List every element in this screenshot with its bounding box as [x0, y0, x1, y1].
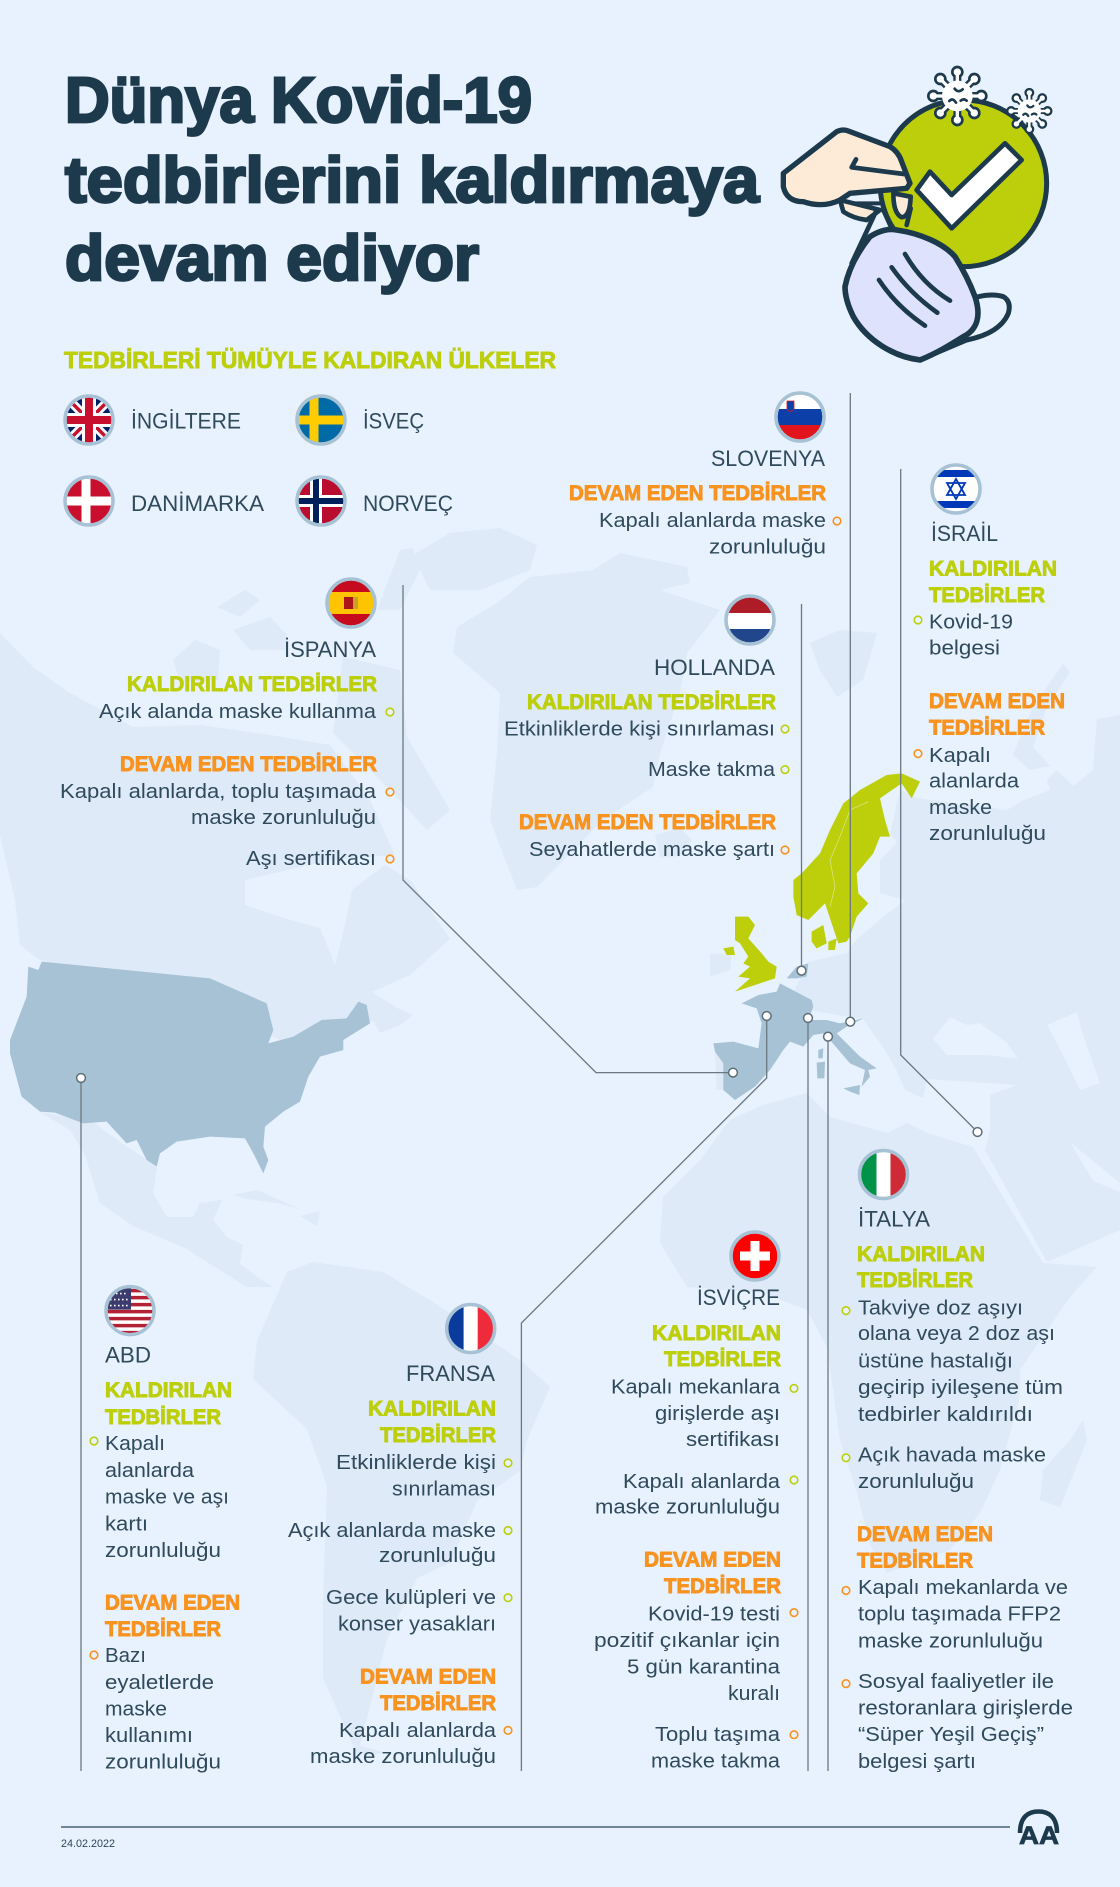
title: tedbirlerini kaldırmaya: [65, 144, 759, 216]
heading: countries that lifted all measures: TEDBİRLERİ TÜMÜYLE KALDIRAN ÜLKELER: [64, 347, 556, 373]
panel: Italy: zorunluluğu: [858, 1470, 974, 1493]
panel: Spain: DEVAM EDEN TEDBİRLER: [120, 752, 377, 776]
panel: Switzerland: maske zorunluluğu: [595, 1496, 780, 1518]
panel: Israel: alanlarda: [929, 770, 1020, 793]
panel: Netherlands: KALDIRILAN TEDBİRLER: [527, 690, 776, 714]
panel: Israel: TEDBİRLER: [929, 716, 1045, 740]
icon: flag of France: [446, 1304, 496, 1354]
panel: USA: kartı: [105, 1512, 148, 1536]
panel: Switzerland: Toplu taşıma: [655, 1723, 781, 1746]
panel: USA: zorunluluğu: [105, 1539, 221, 1562]
illustration: hand removing mask with check mark: [783, 67, 1051, 360]
panel: Israel: İSRAİL: [931, 521, 998, 546]
highlighted United States: [10, 962, 370, 1173]
panel: USA: maske: [105, 1698, 167, 1720]
flag and label: United Kingdom: [64, 395, 241, 445]
panel: Netherlands: Seyahatlerde maske şartı: [529, 838, 775, 861]
panel: Spain: Aşı sertifikası: [246, 847, 376, 870]
panel: Switzerland: sertifikası: [686, 1428, 780, 1451]
panel: Italy: Açık havada maske: [858, 1444, 1046, 1467]
panel: Slovenia: SLOVENYA: [711, 446, 825, 471]
panel: France: TEDBİRLER: [380, 1691, 496, 1715]
icon: flag of Slovenia: [775, 392, 825, 442]
panel: Slovenia: [569, 392, 841, 558]
panel: France: DEVAM EDEN: [360, 1665, 496, 1689]
panel: Spain: Kapalı alanlarda, toplu taşımada: [60, 780, 377, 803]
icon: Anadolu Agency logo: AA: [1019, 1822, 1059, 1850]
panel: Switzerland: girişlerde aşı: [655, 1402, 780, 1425]
panel: France: Kapalı alanlarda: [339, 1719, 497, 1742]
panel: USA: Bazı: [105, 1644, 146, 1667]
panel: Switzerland: kuralı: [728, 1682, 780, 1705]
panel: Switzerland: DEVAM EDEN: [644, 1548, 781, 1572]
panel: Spain: Açık alanda maske kullanma: [99, 700, 377, 723]
icon: small virus: [1007, 89, 1051, 133]
panel: Spain: maske zorunluluğu: [191, 806, 376, 829]
icon: flag of Israel: [931, 464, 981, 514]
panel: France: sınırlaması: [392, 1478, 496, 1501]
panel: Italy: TEDBİRLER: [857, 1548, 973, 1572]
panel: Italy: [842, 1150, 1073, 1773]
panel: Netherlands: [504, 595, 789, 861]
panel: France: Etkinliklerde kişi: [336, 1451, 496, 1474]
panel: USA: maske ve aşı: [105, 1486, 229, 1509]
panel: Slovenia: Kapalı alanlarda maske: [599, 509, 826, 532]
panel: Italy: üstüne hastalığı: [858, 1350, 1013, 1373]
flag and label: Norway: [296, 476, 453, 526]
panel: USA: TEDBİRLER: [105, 1617, 221, 1641]
panel: Israel: maske: [929, 796, 992, 819]
panel: Italy: restoranlara girişlerde: [858, 1697, 1073, 1720]
panel: Slovenia: DEVAM EDEN TEDBİRLER: [569, 481, 826, 505]
panel: USA: alanlarda: [105, 1459, 195, 1482]
flag and label: Sweden: [296, 395, 424, 445]
panel: USA: [90, 1286, 240, 1774]
panel: Switzerland: TEDBİRLER: [664, 1574, 781, 1598]
panel: Italy: TEDBİRLER: [857, 1268, 973, 1292]
panel: USA: zorunluluğu: [105, 1751, 221, 1774]
panel: USA: TEDBİRLER: [105, 1405, 221, 1429]
panel: Switzerland: maske takma: [651, 1749, 781, 1772]
flag and label: Norway: NORVEÇ: [363, 491, 453, 516]
panel: USA: eyaletlerde: [105, 1671, 214, 1694]
panel: France: Açık alanlarda maske: [288, 1519, 496, 1542]
panel: Israel: Kapalı: [929, 744, 991, 767]
panel: Italy: İTALYA: [858, 1206, 930, 1231]
highlighted Europe countries: [710, 773, 920, 1100]
panel: Switzerland: 5 gün karantina: [627, 1655, 781, 1678]
panel: France: KALDIRILAN: [368, 1397, 496, 1421]
icon: flag of Italy: [858, 1150, 908, 1200]
panel: Italy: “Süper Yeşil Geçiş”: [858, 1723, 1044, 1746]
flag and label: Denmark: DANİMARKA: [131, 491, 264, 516]
connector lines and map markers: [77, 393, 982, 1771]
panel: Spain: KALDIRILAN TEDBİRLER: [127, 672, 377, 696]
title: [65, 64, 759, 294]
panel: USA: Kapalı: [105, 1432, 165, 1455]
panel: Netherlands: HOLLANDA: [654, 655, 775, 680]
world map background: [0, 528, 1120, 1754]
panel: Israel: KALDIRILAN: [929, 557, 1057, 581]
panel: Italy: Sosyal faaliyetler ile: [858, 1670, 1054, 1693]
flag and label: United Kingdom: İNGİLTERE: [131, 408, 241, 434]
panel: France: TEDBİRLER: [380, 1423, 496, 1447]
icon: face mask: [845, 208, 1009, 360]
panel: Israel: DEVAM EDEN: [929, 689, 1065, 713]
panel: Israel: belgesi: [929, 637, 1000, 660]
icon: flag of Switzerland: [730, 1231, 780, 1281]
panel: Netherlands: DEVAM EDEN TEDBİRLER: [519, 810, 776, 834]
panel: Italy: belgesi şartı: [858, 1750, 976, 1773]
panel: France: Gece kulüpleri ve: [326, 1586, 496, 1609]
panel: Spain: İSPANYA: [284, 637, 376, 662]
icon: flag of Spain: [326, 578, 376, 628]
panel: Israel: zorunluluğu: [929, 822, 1046, 845]
panel: Italy: tedbirler kaldırıldı: [858, 1403, 1033, 1426]
panel: countries that lifted all measures: [64, 395, 453, 526]
panel: Italy: Kapalı mekanlarda ve: [858, 1576, 1068, 1599]
panel: Switzerland: İSVİÇRE: [697, 1285, 780, 1310]
panel: France: maske zorunluluğu: [310, 1745, 496, 1768]
panel: USA: KALDIRILAN: [105, 1378, 232, 1402]
panel: Switzerland: TEDBİRLER: [664, 1347, 781, 1371]
icon: Anadolu Agency logo: [1019, 1812, 1059, 1850]
panel: Italy: KALDIRILAN: [857, 1242, 985, 1266]
panel: Switzerland: KALDIRILAN: [652, 1321, 781, 1345]
panel: Israel: Kovid-19: [929, 611, 1013, 634]
panel: Israel: [914, 464, 1065, 845]
panel: Italy: Takviye doz aşıyı: [858, 1296, 1023, 1319]
title: devam ediyor: [65, 222, 479, 294]
icon: flag of the USA: [105, 1286, 155, 1336]
panel: Italy: maske zorunluluğu: [858, 1630, 1043, 1652]
panel: France: [288, 1304, 512, 1768]
panel: France: zorunluluğu: [379, 1544, 496, 1567]
icon: flag of the Netherlands: [725, 595, 775, 645]
icon: hand: [783, 130, 911, 220]
icon: green check circle: [880, 100, 1047, 267]
panel: Switzerland: Kapalı alanlarda: [623, 1470, 781, 1493]
footer: [61, 1812, 1059, 1850]
panel: Netherlands: Maske takma: [648, 758, 776, 781]
icon: large virus: [928, 67, 986, 125]
panel: Spain: [60, 578, 394, 870]
title: Dünya Kovid-19: [65, 64, 532, 136]
panel: Switzerland: Kovid-19 testi: [648, 1603, 780, 1626]
panel: Switzerland: [594, 1231, 798, 1772]
panel: Netherlands: Etkinliklerde kişi sınırlaması: [504, 718, 775, 740]
panel: USA: ABD: [105, 1342, 151, 1368]
panel: Italy: toplu taşımada FFP2: [858, 1603, 1061, 1626]
flag and label: Sweden: İSVEÇ: [363, 408, 424, 434]
flag and label: Denmark: [64, 476, 264, 526]
panel: USA: kullanımı: [105, 1724, 193, 1747]
panel: Italy: geçirip iyileşene tüm: [858, 1376, 1063, 1399]
panel: Switzerland: Kapalı mekanlara: [611, 1376, 781, 1398]
panel: USA: DEVAM EDEN: [105, 1591, 240, 1615]
panel: Slovenia: zorunluluğu: [709, 536, 826, 558]
panel: Israel: TEDBİRLER: [929, 583, 1045, 607]
panel: Italy: olana veya 2 doz aşı: [858, 1322, 1055, 1345]
panel: France: FRANSA: [406, 1361, 495, 1386]
panel: France: konser yasakları: [338, 1612, 496, 1636]
panel: Italy: DEVAM EDEN: [857, 1522, 993, 1546]
date: 24.02.2022: [61, 1838, 115, 1850]
panel: Switzerland: pozitif çıkanlar için: [594, 1629, 780, 1652]
